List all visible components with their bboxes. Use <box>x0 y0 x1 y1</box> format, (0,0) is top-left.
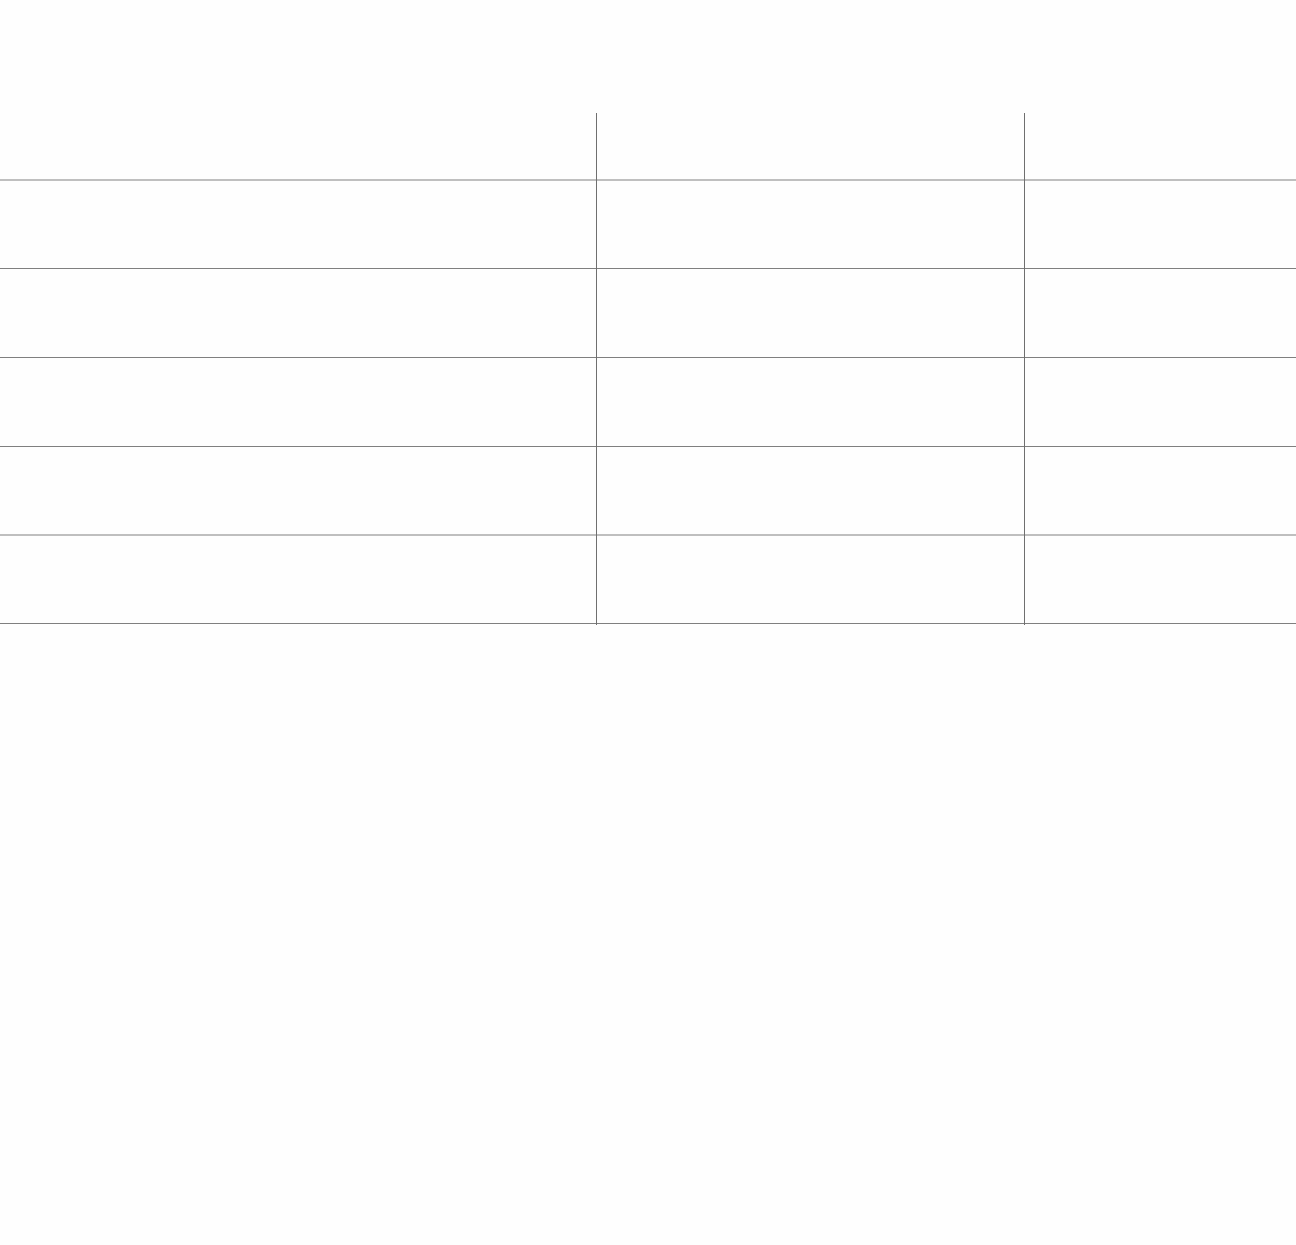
table grid <box>0 113 1296 625</box>
